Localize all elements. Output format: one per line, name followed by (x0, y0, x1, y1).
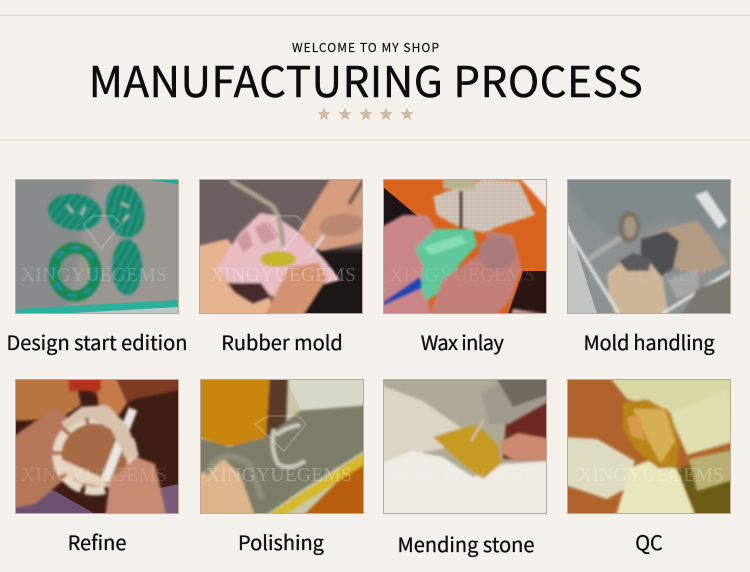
photo: quality control (567, 379, 731, 514)
watermark: XINGYUEGEMS (206, 465, 352, 486)
subtitle: welcome to my shop: WELCOME TO MY SHOP (292, 39, 440, 56)
watermark: XINGYUEGEMS (21, 465, 167, 486)
photo: refine (15, 379, 179, 514)
panel: design start edition (6, 179, 188, 356)
label: mending stone: Mending stone (398, 529, 534, 558)
title: MANUFACTURING PROCESS (89, 49, 643, 110)
top rule (0, 15, 750, 16)
label: QC: QC (635, 527, 663, 556)
photo: mold handling (567, 179, 731, 314)
panel: wax inlay (383, 179, 547, 356)
panel: QC (567, 379, 731, 556)
watermark: XINGYUEGEMS (573, 265, 719, 286)
watermark: XINGYUEGEMS (389, 465, 535, 486)
star rating row (318, 108, 414, 120)
watermark: XINGYUEGEMS (21, 265, 167, 286)
photo: rubber mold carving (199, 179, 363, 314)
watermark logo (255, 416, 306, 451)
label: refine: Refine (68, 527, 126, 556)
photo: mending stone (383, 379, 547, 514)
watermark: XINGYUEGEMS (389, 265, 535, 286)
label: wax inlay: Wax inlay (421, 327, 503, 356)
panel: mending stone (383, 379, 547, 558)
photo: wax inlay (383, 179, 547, 314)
panel: mold handling (567, 179, 731, 356)
panel: polishing (200, 379, 364, 556)
photo: CAD rings on screen (15, 179, 179, 314)
watermark logo (267, 216, 305, 249)
panel: rubber mold (199, 179, 363, 356)
watermark logo (83, 216, 121, 249)
photo: polishing (200, 379, 364, 514)
label: rubber mold: Rubber mold (221, 327, 343, 356)
watermark: XINGYUEGEMS (578, 465, 724, 486)
watermark: XINGYUEGEMS (210, 265, 356, 286)
label: mold handling: Mold handling (584, 327, 714, 356)
label: polishing: Polishing (238, 527, 324, 556)
label: design start edition: Design start edition (6, 327, 188, 356)
header rule (0, 140, 750, 141)
panel: refine (15, 379, 179, 556)
